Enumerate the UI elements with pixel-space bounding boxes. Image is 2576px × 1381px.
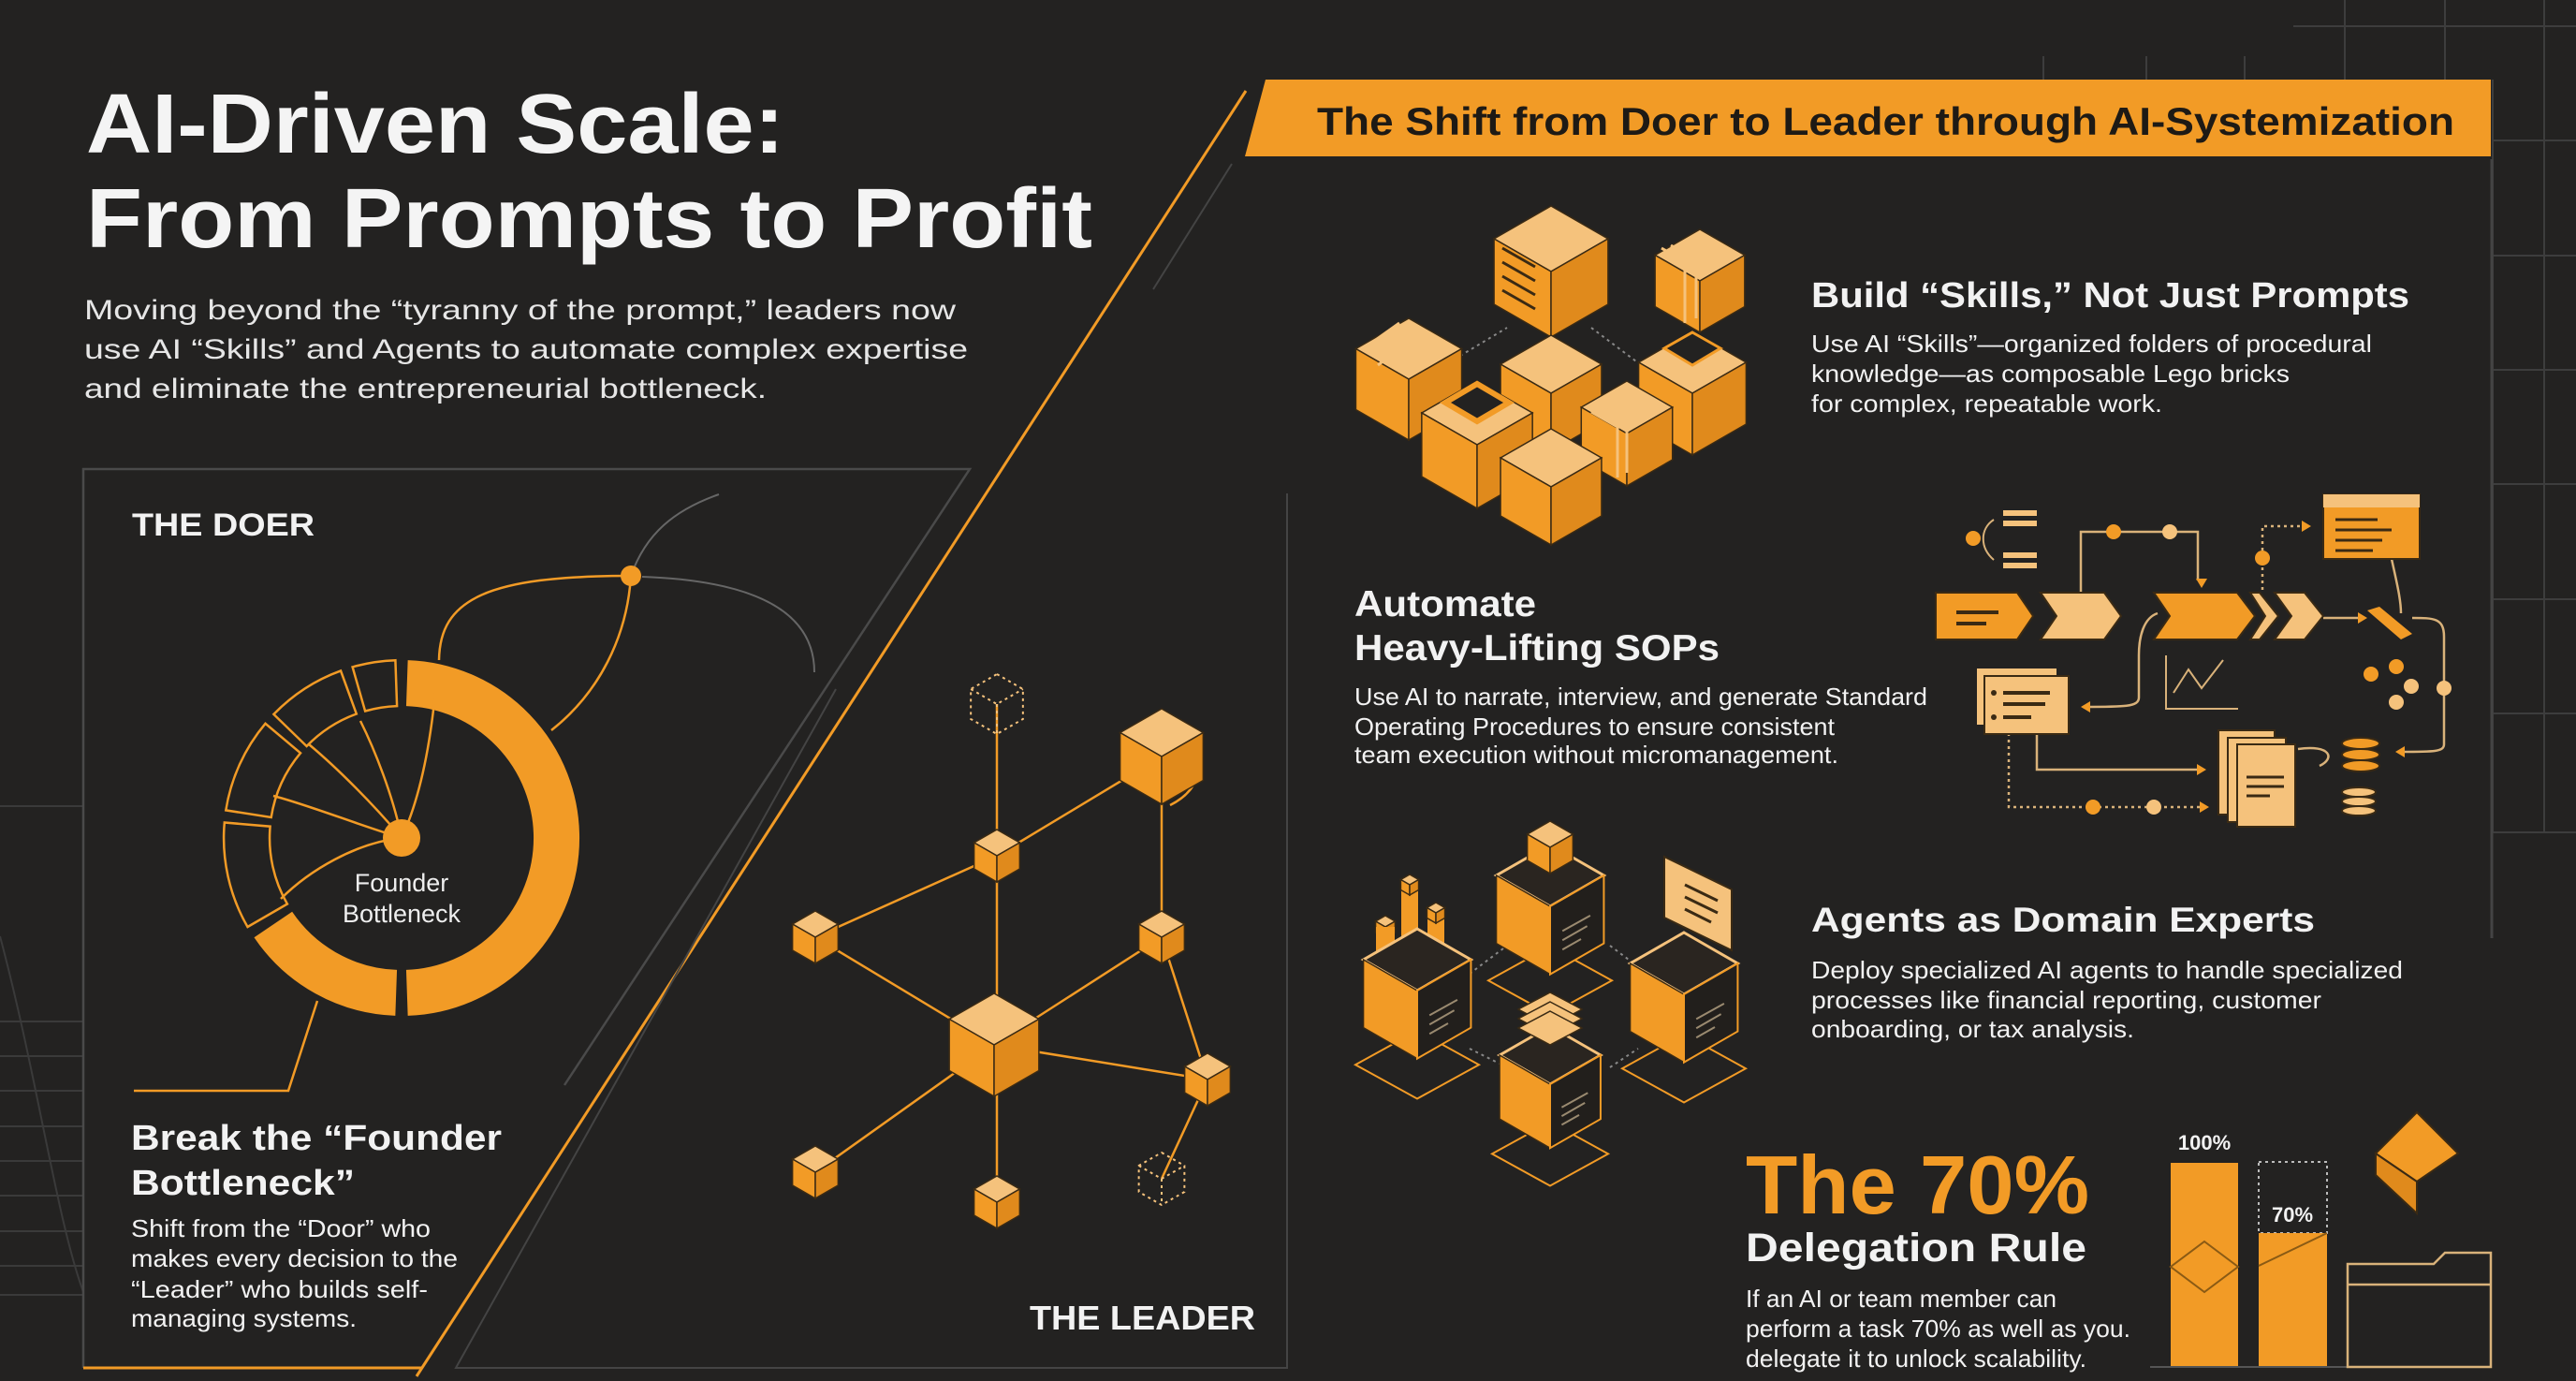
- text: build skills: Build “Skills,” Not Just Prompts: [1811, 276, 2409, 316]
- text: automate SOPs: team execution without micromanagement.: [1354, 741, 1838, 769]
- text: agents: [1811, 901, 2403, 1043]
- text: build skills: Use AI “Skills”—organized folders of procedural: [1811, 330, 2372, 358]
- text: agents: processes like financial reporting, customer: [1811, 986, 2321, 1014]
- heading: THE DOER: THE DOER: [132, 507, 315, 543]
- window icon: [2323, 494, 2420, 559]
- text: automate SOPs: Use AI to narrate, interview, and generate Standard: [1354, 683, 1927, 711]
- section: build skills: [1355, 206, 2409, 545]
- text: break the founder bottleneck: [131, 1119, 502, 1332]
- heading: THE LEADER: THE LEADER: [1030, 1299, 1255, 1337]
- subtitle: Moving beyond the “tyranny of the prompt,” leaders now: [84, 295, 956, 326]
- icon: orange block: [2376, 1112, 2458, 1213]
- doc icon: [1977, 668, 2056, 725]
- subtitle: and eliminate the entrepreneurial bottleneck.: [84, 374, 767, 404]
- chart icon: [2166, 655, 2238, 709]
- background grid: right edge: [2043, 0, 2576, 832]
- banner: [1245, 80, 2491, 156]
- text: automate SOPs: [1354, 584, 1927, 769]
- section: 70% rule: [1746, 1112, 2491, 1373]
- text: 70% rule: perform a task 70% as well as you.: [1746, 1315, 2130, 1343]
- text: build skills: knowledge—as composable Lego bricks: [1811, 360, 2290, 388]
- section: automate SOPs: [1354, 494, 2452, 827]
- text: agents: Deploy specialized AI agents to handle specialized: [1811, 956, 2403, 984]
- monitor: [1664, 857, 1732, 950]
- bars on finance box: [1376, 874, 1445, 969]
- subtitle: use AI “Skills” and Agents to automate complex expertise: [84, 334, 968, 365]
- text: break the founder bottleneck: Bottleneck”: [131, 1164, 355, 1203]
- text: 70% rule: If an AI or team member can: [1746, 1285, 2056, 1313]
- diagram: founder bottleneck ring: Founder: [355, 869, 448, 897]
- text: agents: Agents as Domain Experts: [1811, 901, 2315, 939]
- panel: the doer: [83, 469, 970, 1368]
- text: automate SOPs: Automate: [1354, 584, 1536, 624]
- text: break the founder bottleneck: “Leader” who builds self-: [131, 1275, 428, 1303]
- text: 70% rule: delegate it to unlock scalability.: [1746, 1344, 2086, 1373]
- text: automate SOPs: Operating Procedures to ensure consistent: [1354, 713, 1836, 741]
- network diagram: [793, 674, 1230, 1228]
- bar chart: [2150, 1131, 2347, 1367]
- panel: the leader: [456, 493, 1287, 1368]
- text: automate SOPs: Heavy-Lifting SOPs: [1354, 628, 1720, 668]
- section: agents: [1355, 821, 2403, 1185]
- title: From Prompts to Profit: [86, 172, 1092, 266]
- text: build skills: for complex, repeatable work.: [1811, 389, 2162, 418]
- text: break the founder bottleneck: Break the “Founder: [131, 1119, 502, 1158]
- diagram: SOP flow: [1936, 494, 2452, 827]
- text: 70% rule: [1746, 1139, 2130, 1373]
- title: [86, 78, 1092, 266]
- icon: folder: [2348, 1253, 2491, 1367]
- icon: agent boxes: [1355, 821, 1746, 1185]
- text: agents: onboarding, or tax analysis.: [1811, 1015, 2134, 1043]
- stacked docs: [2218, 730, 2275, 815]
- divider: orange diagonal: [417, 91, 1246, 1376]
- diagram: founder bottleneck ring: [134, 494, 814, 1091]
- text: build skills: [1811, 276, 2409, 418]
- bar chart: 70%: [2272, 1203, 2313, 1227]
- icon: skill cubes: [1355, 206, 1746, 545]
- diagram: founder bottleneck ring: Bottleneck: [343, 900, 461, 928]
- chevrons: [1936, 593, 2033, 639]
- text: 70% rule: Delegation Rule: [1746, 1226, 2086, 1271]
- banner: The Shift from Doer to Leader through AI-Systemization: [1317, 99, 2454, 143]
- title: AI-Driven Scale:: [86, 78, 784, 171]
- text: break the founder bottleneck: managing systems.: [131, 1304, 357, 1332]
- bar chart: 100%: [2178, 1131, 2231, 1154]
- databases: [2342, 738, 2379, 815]
- paper stack: [1518, 992, 1582, 1045]
- subtitle: [84, 295, 968, 404]
- text: 70% rule: The 70%: [1746, 1139, 2089, 1231]
- list icon: [1966, 510, 2037, 568]
- text: break the founder bottleneck: Shift from the “Door” who: [131, 1214, 431, 1242]
- text: break the founder bottleneck: makes every decision to the: [131, 1244, 458, 1272]
- background lines: left edge: [0, 806, 83, 1295]
